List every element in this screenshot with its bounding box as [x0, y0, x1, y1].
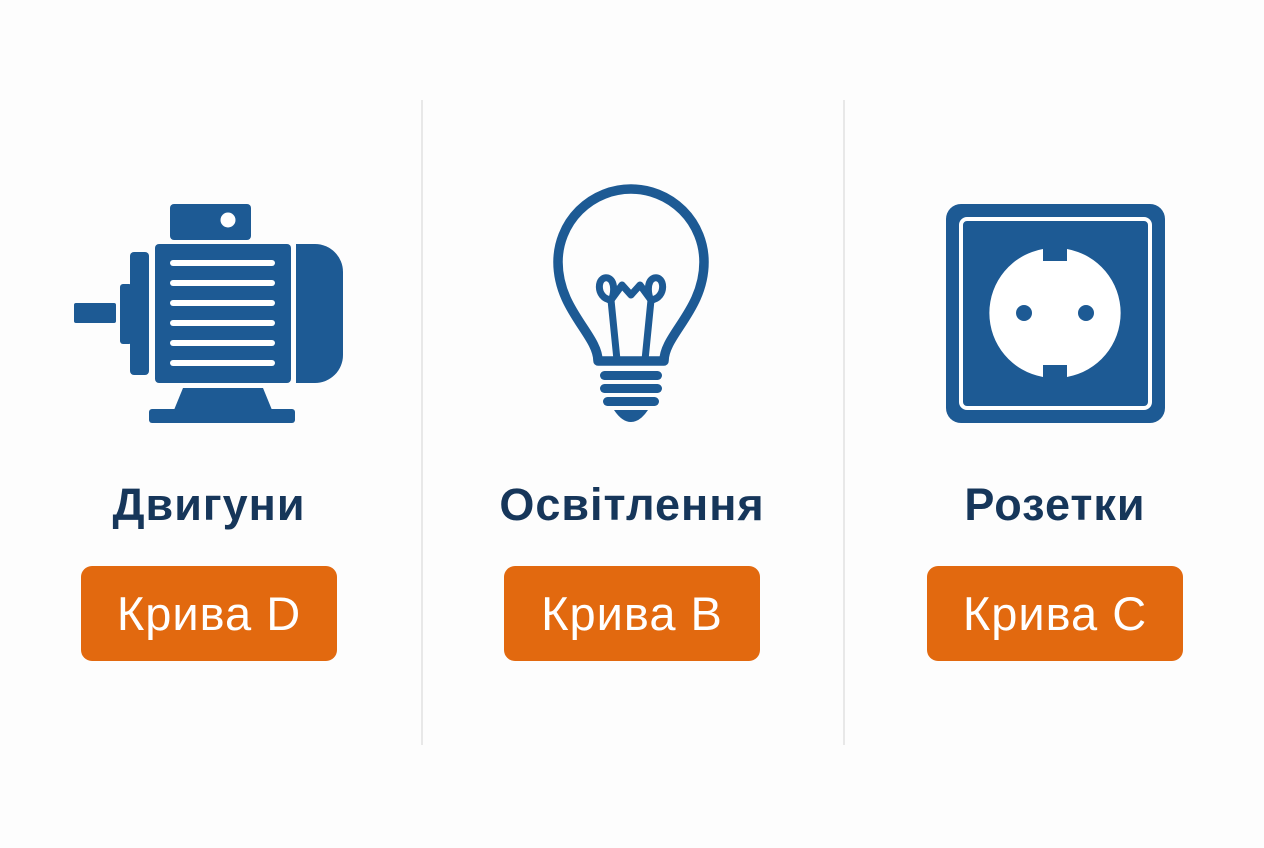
- title: lighting: Освітлення: [499, 479, 765, 530]
- title: motors: Двигуни: [112, 479, 306, 530]
- badge: curve B: [504, 566, 760, 661]
- badge: curve D: [81, 566, 337, 661]
- badge: curve C: [927, 566, 1183, 661]
- title: sockets: Розетки: [964, 479, 1146, 530]
- badge: curve C: Крива C: [963, 587, 1147, 640]
- badge: curve D: Крива D: [117, 587, 301, 640]
- badge: curve B: Крива B: [541, 587, 723, 640]
